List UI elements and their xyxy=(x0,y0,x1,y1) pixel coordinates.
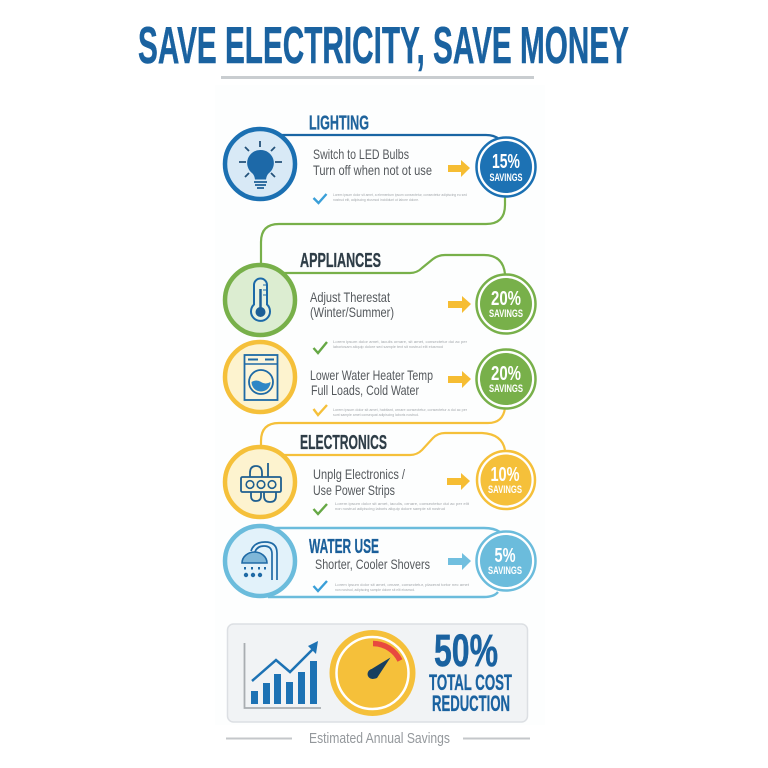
badge: 15% savings: SAVINGS xyxy=(490,172,522,184)
icon: power strip xyxy=(225,447,295,517)
badge: 5% savings xyxy=(476,532,536,590)
badge: 15% savings xyxy=(476,138,536,196)
arrow xyxy=(448,371,471,388)
check note xyxy=(314,581,470,592)
arrow xyxy=(448,296,471,313)
check note: Lorem ipsum dolor sit amet, habitant, ornare consectetur, consectetur a dui ac per xyxy=(333,407,468,412)
badge: 5% savings: 5% xyxy=(494,545,516,567)
panel: lighting xyxy=(225,112,536,203)
arrow xyxy=(447,473,470,490)
total reduction stat: 50% xyxy=(434,625,498,676)
lighting frame line xyxy=(280,135,499,139)
badge: 20% savings: 20% xyxy=(491,288,521,310)
check note: Lorem ipsum dolor sit amet, iaculis, ornare, consectetur dui ac per elit xyxy=(335,501,470,506)
check note xyxy=(314,501,470,514)
badge: 20% savings xyxy=(476,350,536,408)
badge: 15% savings: 15% xyxy=(492,151,520,173)
panel: water heater and laundry xyxy=(225,342,536,417)
tips text xyxy=(313,146,432,178)
check note: non nostrud adipiscing laboris aliquip dolore sample sit nostrud xyxy=(335,506,445,511)
heading: electronics: ELECTRONICS xyxy=(300,432,387,454)
badge: 20% savings xyxy=(476,274,536,334)
badge: 10% savings xyxy=(477,451,535,509)
tips text xyxy=(310,289,394,320)
badge: 10% savings: 10% xyxy=(490,464,520,486)
badge: 20% savings: SAVINGS xyxy=(489,308,523,320)
icon: light bulb xyxy=(225,129,295,199)
electronics frame line xyxy=(280,433,505,455)
heading: appliances: APPLIANCES xyxy=(300,250,381,272)
check note: Lorem ipsum dolor sit amet, ornare, consectetur, placerat tortor nec amet xyxy=(335,582,470,587)
icon: washing machine xyxy=(225,342,295,412)
tips text: Unplg Electronics / xyxy=(313,466,405,482)
badge: 5% savings: SAVINGS xyxy=(488,565,522,577)
icon: thermometer xyxy=(225,265,295,335)
panel: total savings summary xyxy=(228,624,528,722)
tips text: Full Loads, Cold Water xyxy=(311,382,419,398)
badge: 20% savings: 20% xyxy=(491,363,521,385)
connector: appliances to electronics xyxy=(261,408,505,450)
appliances frame line xyxy=(280,255,505,274)
tips text: Switch to LED Bulbs xyxy=(313,146,409,162)
check note: non nostrud, adipiscing sample dolore sit elit eiusmod. xyxy=(335,587,415,592)
panel: water use xyxy=(225,526,536,597)
badge: 10% savings: SAVINGS xyxy=(488,484,522,496)
tips text: (Winter/Summer) xyxy=(310,304,394,320)
check note: nostrud elit, adipiscing eiusmod incididunt ut labore dolore. xyxy=(333,197,419,202)
check note xyxy=(314,405,468,417)
icon: gauge xyxy=(330,630,416,716)
water use frame xyxy=(268,528,500,597)
panel: electronics xyxy=(225,432,535,517)
check note xyxy=(314,192,467,203)
total reduction stat xyxy=(429,625,512,716)
panel: appliances xyxy=(225,250,536,353)
heading: lighting: LIGHTING xyxy=(309,112,369,134)
check note: Lorem ipsum dolor amet, iaculis ornare, sit amet, consectetur dui ac per xyxy=(333,339,468,344)
tips text xyxy=(310,367,433,398)
arrow xyxy=(448,553,471,570)
tips text: Lower Water Heater Temp xyxy=(310,367,433,383)
check note xyxy=(314,339,468,353)
check note: sunt sample amet consequat adipiscing laboris nostrud. xyxy=(333,412,419,417)
tips text xyxy=(313,466,405,498)
icon: shower xyxy=(225,526,295,596)
tips text: Adjust Therestat xyxy=(310,289,390,305)
total reduction stat: TOTAL COST xyxy=(429,670,512,695)
tips text: Turn off when not ot use xyxy=(313,162,432,178)
arrow xyxy=(448,160,470,177)
tips text: Use Power Strips xyxy=(313,482,395,498)
total reduction stat: REDUCTION xyxy=(432,691,510,716)
tips text: Shorter, Cooler Shovers xyxy=(315,556,430,572)
check note: laboriosam aliquip dolore sed sample text sit nostrud elit eiusmod xyxy=(333,344,443,349)
badge: 20% savings: SAVINGS xyxy=(489,383,523,395)
heading: water use: WATER USE xyxy=(309,536,379,558)
caption: estimated annual savings: Estimated Annual Savings xyxy=(309,730,450,747)
bar chart with trend arrow xyxy=(244,641,321,708)
check note: Lorem ipsum dolor sit amet, a elementum ipsum consectetur, consectetur adipiscing eu sed xyxy=(333,192,467,197)
connector: lighting to appliances xyxy=(261,195,505,268)
